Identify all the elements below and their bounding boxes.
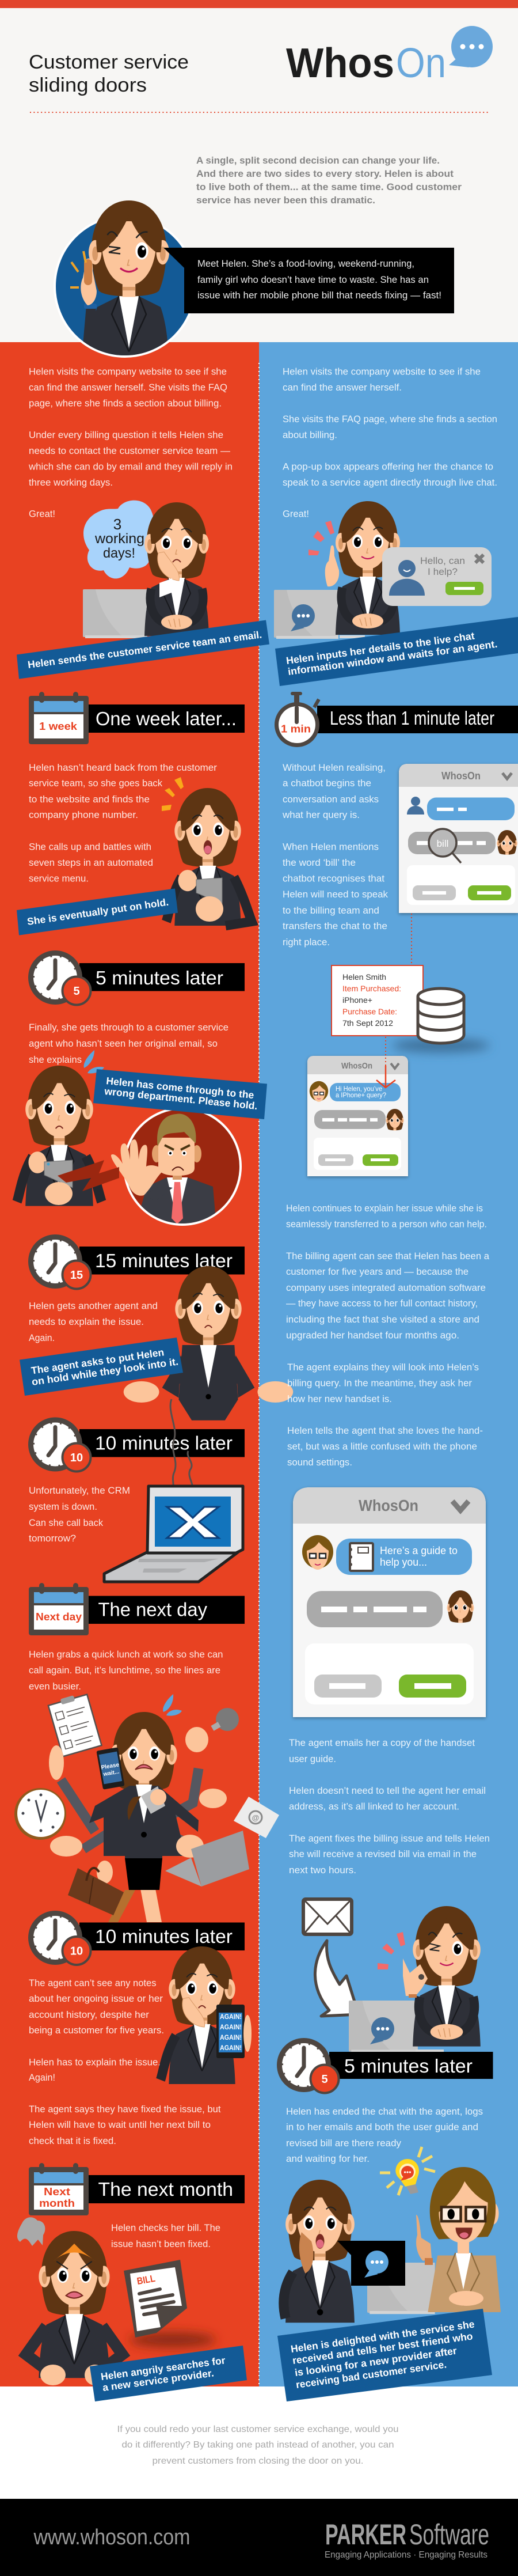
left text: hasn't heard back: company phone number. — [29, 810, 138, 820]
heading: next month: Next — [44, 2186, 70, 2198]
chat window 2: a IPhone+ query? — [336, 1091, 386, 1099]
footer — [0, 2499, 518, 2576]
heading: less than 1 minute later: 1 min — [281, 723, 311, 735]
ribbon: inputs details — [275, 617, 518, 686]
ribbon: agent asks to hold: on hold while they look into it. — [31, 1355, 179, 1388]
right text: emails guide: address, as it’s all linked to her account. — [289, 1802, 459, 1812]
right text: transferred: company uses integrated automation software — [286, 1283, 486, 1293]
email envelope — [234, 1797, 279, 1838]
hands on hips — [40, 2365, 105, 2385]
right text: transferred: The agent explains they will look into Helen’s — [287, 1362, 479, 1373]
right text: website: A pop-up box appears offering her the chance to — [283, 462, 493, 472]
right text: website: can find the answer herself. — [283, 382, 402, 393]
left text: lunch — [29, 1650, 223, 1692]
left text: CRM down: Unfortunately, the CRM — [29, 1486, 130, 1496]
bill document — [124, 2260, 187, 2338]
left text: hasn't heard back: seven steps in an automated — [29, 858, 153, 868]
laptop behind friend — [367, 2263, 435, 2314]
left text: hasn't heard back: service team, so she goes back — [29, 778, 163, 789]
left text: another agent: Again. — [29, 1333, 55, 1343]
email envelope: @ — [252, 1813, 259, 1822]
closing text — [117, 2425, 398, 2466]
chat window 3: guide — [293, 1487, 486, 1717]
Helen winking OK — [413, 1906, 481, 2047]
Meet Helen callout: family girl who doesn’t have time to waste. She has an — [197, 275, 429, 285]
right text: transferred: set, but was a little confused with the phone — [287, 1442, 477, 1452]
title: Customer service — [29, 51, 189, 73]
heading: 15 minutes later — [28, 1234, 245, 1289]
heading: 5 minutes later: 5 minutes later — [96, 967, 223, 988]
right text: ended chat: revised bill are there ready — [286, 2138, 402, 2149]
website url: www.whoson.com — [33, 2525, 191, 2550]
phone: again: AGAIN! — [220, 2044, 242, 2052]
friend with glasses — [416, 2167, 501, 2312]
left text: can't see notes: Helen will have to wait until her next bill to — [29, 2120, 211, 2130]
coffee mug — [128, 1786, 165, 1820]
left text: website: Under every billing question it tells Helen she — [29, 430, 223, 441]
ribbon: sends email — [17, 620, 269, 679]
Helen surprised — [284, 2180, 355, 2323]
left text: checks bill — [111, 2223, 220, 2249]
left text: CRM down — [29, 1486, 130, 1544]
left text: website: which she can do by email and they will reply in — [28, 462, 233, 472]
laptop with chat icon — [349, 2001, 444, 2053]
right text: emails guide: Helen doesn’t need to tell the agent her email — [289, 1786, 486, 1796]
Helen on phone — [166, 788, 252, 926]
intro paragraph: service has never been this dramatic. — [196, 195, 375, 206]
right text: emails guide — [289, 1738, 490, 1876]
ribbon: angrily searches: a new service provider. — [102, 2367, 215, 2393]
left text: can't see notes: The agent says they have fixed the issue, but — [29, 2104, 221, 2115]
Helen worried with phone — [17, 1066, 102, 1206]
Meet Helen callout: issue with her mobile phone bill that needs fixing — fast! — [197, 290, 441, 301]
left text: finally — [29, 1022, 228, 1065]
phone — [196, 878, 223, 922]
light bulb — [211, 1708, 239, 1731]
light bulb idea — [380, 2147, 435, 2195]
left text: can't see notes: about her ongoing issue or her — [29, 1994, 163, 2004]
ribbon: wrong department: wrong department. Please hold. — [104, 1085, 258, 1112]
left text: can't see notes — [29, 1978, 221, 2146]
right text: chatbot — [282, 763, 389, 948]
heading: 5 minutes later: 5 — [73, 985, 80, 998]
right text: chatbot: to the billing team and — [283, 906, 379, 916]
customer record card: Purchase Date: — [342, 1007, 397, 1016]
WhosOn logo: Whos — [286, 40, 394, 86]
thought bubble: 3 working days: 3 — [113, 516, 121, 533]
Helen intro portrait — [55, 200, 195, 368]
left text: finally: Finally, she gets through to a customer service — [29, 1022, 228, 1033]
right text: website: speak to a service agent directly through live chat. — [283, 478, 497, 488]
Helen shrugging — [124, 1266, 293, 1420]
magnifier: bill: bill — [437, 838, 448, 849]
live chat pop-up: Hello, can — [420, 555, 465, 566]
Helen sad with laptop — [144, 502, 209, 636]
legs — [108, 1889, 162, 1922]
heading: next day: The next day — [98, 1599, 207, 1620]
right text: chatbot: chatbot recognises that — [283, 874, 384, 884]
OK hand — [403, 1958, 428, 1998]
left text: finally: agent who hasn’t seen her original email, so — [29, 1039, 218, 1049]
laptop right with chat icon — [274, 590, 365, 639]
ribbon: sends email: Helen sends the customer service team an email. — [27, 628, 262, 670]
skirt — [125, 1858, 162, 1890]
ribbon: on hold: She is eventually put on hold. — [26, 896, 169, 927]
Meet Helen callout — [163, 248, 454, 313]
red arrow from database — [376, 1037, 395, 1088]
Helen pointing up — [325, 501, 400, 635]
magnifier: bill — [429, 829, 461, 863]
heading: 5 minutes later 2: 5 — [321, 2073, 328, 2086]
extra arms — [61, 1768, 204, 1852]
right text: ended chat: and waiting for her. — [286, 2154, 370, 2164]
right text: transferred: billing query. In the meantime, they ask her — [287, 1378, 473, 1388]
left text: website: can find the answer herself. She visits the FAQ — [29, 382, 227, 393]
right text: transferred: The billing agent can see that Helen has been a — [286, 1251, 490, 1262]
right text: chatbot: transfers the chat to the — [283, 921, 387, 931]
blue panel — [259, 342, 518, 2386]
right text: chatbot: Without Helen realising, — [283, 763, 386, 773]
chat window 1: WhosOn — [441, 770, 481, 782]
Parker Software logo: Engaging Applications · Engaging Results — [325, 2550, 487, 2560]
heading: 5 minutes later — [28, 950, 245, 1005]
heading: next day: Next day — [36, 1611, 82, 1623]
left text: another agent — [29, 1301, 158, 1343]
right text: transferred — [286, 1203, 490, 1468]
closing text: do it differently? By taking one path instead of another, you can — [122, 2440, 394, 2450]
heading: one week later — [29, 692, 245, 744]
left text: CRM down: tomorrow? — [29, 1533, 76, 1544]
right text: ended chat: in to her emails and both the user guide and — [286, 2122, 478, 2132]
phone please wait: wait... — [102, 1769, 120, 1778]
heading: next day — [29, 1583, 245, 1635]
phone: again: AGAIN! — [220, 2033, 242, 2041]
heading: 10 minutes later 2 — [28, 1911, 245, 1965]
left text: can't see notes: check that it is fixed. — [29, 2136, 116, 2146]
right text: transferred: including the fact that she visited a store and — [286, 1314, 479, 1325]
Parker Software logo — [325, 2518, 489, 2560]
open laptop — [165, 1831, 249, 1886]
intro paragraph: to live both of them... at the same time. Good customer — [196, 182, 462, 192]
right text: website: She visits the FAQ page, where she finds a section — [283, 414, 497, 425]
clipboard — [47, 1692, 102, 1756]
right text: website — [283, 366, 497, 520]
right text: transferred: seamlessly transferred to a person who can help. — [286, 1219, 487, 1230]
ribbon: on hold — [17, 888, 178, 935]
left text: hasn't heard back — [29, 763, 218, 884]
crashed laptop — [104, 1486, 243, 1582]
ribbon: wrong department — [93, 1069, 267, 1119]
sweat drops 2 — [163, 1694, 182, 1716]
intro paragraph: A single, split second decision can change your life. — [196, 156, 440, 166]
chat window 2 — [307, 1056, 408, 1176]
ribbon: agent asks to hold — [20, 1338, 183, 1396]
right text: transferred: how her new handset is. — [287, 1394, 392, 1404]
heading: 5 minutes later 2 — [277, 2038, 493, 2093]
live chat pop-up — [382, 547, 492, 606]
heading: 10 minutes later 2: 10 — [70, 1945, 83, 1957]
ribbon: delighted: is looking for a new provider after — [294, 2345, 458, 2378]
right text: emails guide: she will receive a revised bill via email in the — [289, 1849, 477, 1859]
heading: 10 minutes later — [28, 1417, 245, 1471]
left text: can't see notes: The agent can’t see any notes — [29, 1978, 157, 1988]
chat window 2: Hi Helen, you’ve — [336, 1085, 382, 1093]
database icon — [418, 988, 464, 1043]
worried mouth — [135, 1765, 153, 1770]
shadow under bill — [130, 2332, 216, 2347]
heading: 15 minutes later: 15 minutes later — [95, 1250, 233, 1271]
thought bubble: 3 working days — [83, 501, 154, 578]
left text: CRM down: system is down. — [29, 1502, 97, 1512]
right text: website: Great! — [283, 509, 309, 520]
phone: again: AGAIN! — [220, 2013, 242, 2021]
intro paragraph: And there are two sides to every story. Helen is about — [196, 169, 454, 179]
ribbon: inputs details: Helen inputs her details to the live chat — [285, 630, 475, 666]
right text: transferred: Helen continues to explain her issue while she is — [286, 1203, 483, 1214]
right text: chatbot: the word ‘bill’ the — [283, 858, 356, 868]
angry steam cloud — [17, 2217, 45, 2246]
phone 2 — [44, 1160, 73, 1205]
chat window 3: guide: Here’s a guide to — [380, 1545, 458, 1556]
left text: another agent: Helen gets another agent and — [29, 1301, 158, 1312]
phone: again: AGAIN! — [220, 2023, 242, 2031]
orange alert marks — [162, 777, 184, 811]
multitasking Helen — [14, 1692, 279, 1922]
phone: again — [216, 2005, 252, 2058]
heading: 5 minutes later 2: 5 minutes later — [344, 2055, 473, 2077]
left text: lunch: Helen grabs a quick lunch at work so she can — [29, 1650, 223, 1660]
title: sliding doors — [29, 74, 147, 96]
left text: checks bill: issue hasn’t been fixed. — [111, 2239, 211, 2249]
right text: website: about billing. — [283, 430, 337, 441]
customer record card: iPhone+ — [342, 995, 372, 1005]
red panel — [0, 342, 259, 2386]
wall clock — [14, 1788, 66, 1840]
thought bubble: 3 working days: days! — [103, 545, 135, 561]
left text: checks bill: Helen checks her bill. The — [111, 2223, 220, 2233]
right text: ended chat — [286, 2107, 483, 2164]
heading: 10 minutes later: 10 minutes later — [95, 1433, 233, 1454]
ribbon: delighted — [277, 2309, 492, 2401]
thought bubble: 3 working days: working — [94, 531, 144, 547]
right text: transferred: — they have access to her full contact history, — [286, 1298, 478, 1309]
right text: chatbot: what her query is. — [282, 810, 360, 820]
heading: 15 minutes later: 15 — [70, 1269, 83, 1282]
chat window 3: guide: WhosOn — [359, 1497, 418, 1514]
closing text: prevent customers from closing the door on you. — [152, 2456, 364, 2466]
chat window 3: guide: help you... — [380, 1556, 427, 1568]
right text: transferred: sound settings. — [287, 1457, 352, 1468]
heading: 10 minutes later: 10 — [70, 1452, 83, 1464]
chat window 1 — [399, 764, 518, 913]
left text: website: Helen visits the company website to see if she — [29, 366, 227, 377]
heading: next month: The next month — [98, 2179, 233, 2200]
left text: can't see notes: account history, despite her — [29, 2010, 150, 2020]
pink attention marks — [308, 521, 334, 555]
Parker Software logo: PARKER — [325, 2518, 406, 2551]
left text: website: needs to contact the customer service team — — [29, 446, 231, 456]
heading: one week later: 1 week — [39, 721, 78, 732]
customer record card: Item Purchased: — [342, 984, 401, 993]
phone please wait — [96, 1747, 125, 1790]
left text: hasn't heard back: Helen hasn’t heard back from the customer — [29, 763, 218, 773]
phone please wait: Please — [101, 1761, 120, 1771]
jacket — [89, 1786, 199, 1858]
left text: can't see notes: Again! — [29, 2073, 55, 2083]
ribbon: delighted: receiving bad customer service. — [295, 2358, 447, 2391]
left text: website: three working days. — [29, 478, 113, 488]
heading: one week later: One week later... — [96, 708, 237, 729]
live chat pop-up: I help? — [428, 566, 458, 577]
ribbon: agent asks to hold: The agent asks to put Helen — [31, 1346, 165, 1376]
intro paragraph — [196, 156, 462, 206]
right text: emails guide: next two hours. — [289, 1865, 356, 1876]
laptop left — [83, 589, 147, 638]
left text: website — [28, 366, 233, 520]
angry Helen — [26, 2231, 123, 2378]
ribbon: angrily searches: Helen angrily searches for — [100, 2354, 226, 2382]
lightning bolt — [58, 1160, 119, 1191]
Meet Helen callout: Meet Helen. She’s a food-loving, weekend-running, — [197, 259, 414, 269]
left text: hasn't heard back: to the website and finds the — [29, 794, 150, 805]
right text: transferred: customer for five years and — because the — [286, 1267, 469, 1277]
right text: emails guide: user guide. — [289, 1754, 336, 1764]
right text: chatbot: a chatbot begins the — [283, 778, 371, 789]
Helen frustrated with phone — [161, 1946, 235, 2084]
right text: transferred: upgraded her handset four months ago. — [286, 1331, 459, 1341]
left text: website: Great! — [29, 509, 55, 520]
ribbon: angrily searches — [90, 2346, 247, 2401]
sweat drops — [84, 1050, 104, 1073]
envelope icon — [303, 1899, 352, 1934]
ribbon: wrong department: Helen has come through to the — [106, 1075, 255, 1101]
customer record card: Helen Smith — [342, 972, 386, 982]
ribbon: delighted: received and tells her best friend who — [292, 2330, 474, 2366]
right text: chatbot: When Helen mentions — [283, 842, 379, 853]
left text: can't see notes: Helen has to explain the issue. — [29, 2058, 161, 2068]
left text: finally: she explains — [29, 1055, 82, 1065]
heading: next month: month — [39, 2198, 75, 2209]
hands — [49, 1727, 227, 1884]
title — [29, 51, 189, 96]
heading: less than 1 minute later — [275, 692, 518, 747]
curved arrow — [315, 1941, 359, 2016]
right text: emails guide: The agent fixes the billing issue and tells Helen — [289, 1833, 490, 1844]
right text: chatbot: conversation and asks — [283, 794, 379, 805]
ribbon: delighted: Helen is delighted with the service she — [290, 2318, 475, 2355]
right text: transferred: Helen tells the agent that she loves the hand- — [287, 1426, 483, 1436]
right text: chatbot: Helen will need to speak — [283, 889, 389, 900]
left text: lunch: even busier. — [29, 1681, 81, 1692]
customer record card — [332, 965, 423, 1036]
left text: hasn't heard back: She calls up and battles with — [29, 842, 151, 853]
closing text: If you could redo your last customer service exchange, would you — [117, 2425, 398, 2434]
left text: website: page, where she finds a section about billing. — [29, 399, 222, 409]
right text: chatbot: right place. — [283, 937, 330, 948]
left text: CRM down: Can she call back — [29, 1518, 104, 1528]
briefcase — [68, 1868, 124, 1915]
pink marks — [378, 1932, 405, 1969]
agent stop gesture — [111, 1108, 241, 1227]
smoke from laptop — [170, 1399, 192, 1490]
left text: another agent: needs to explain the issue. — [29, 1317, 144, 1327]
customer record card: 7th Sept 2012 — [342, 1018, 393, 1028]
right text: ended chat: Helen has ended the chat with the agent, logs — [286, 2107, 483, 2117]
heading: 10 minutes later 2: 10 minutes later — [95, 1926, 233, 1947]
right text: website: Helen visits the company website to see if she — [283, 366, 481, 377]
shadow under database — [392, 1039, 490, 1052]
heading: next month — [29, 2163, 245, 2215]
chat window 2: WhosOn — [341, 1061, 372, 1071]
WhosOn logo — [286, 26, 493, 86]
chat callout — [337, 2241, 405, 2286]
left text: lunch: call again. But, it’s lunchtime, so the lines are — [29, 1665, 220, 1676]
left text: hasn't heard back: service menu. — [29, 874, 89, 884]
right text: emails guide: The agent emails her a copy of the handset — [289, 1738, 475, 1748]
top red bar — [0, 0, 518, 8]
left text: can't see notes: being a customer for five years. — [29, 2025, 164, 2036]
WhosOn logo: On — [396, 40, 446, 86]
bill document: BILL — [136, 2273, 156, 2287]
ribbon: inputs details: information window and waits for an agent. — [287, 638, 498, 677]
